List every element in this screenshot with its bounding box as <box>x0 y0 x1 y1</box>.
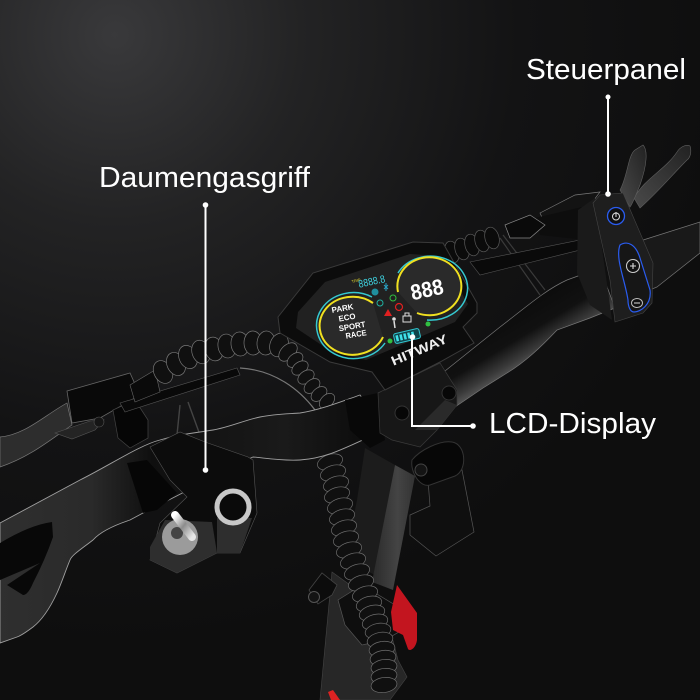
right grip <box>640 222 700 292</box>
right brake levers <box>620 145 691 208</box>
left grip and tube <box>0 395 385 643</box>
red folding lever <box>391 585 417 650</box>
label: Daumengasgriff: Daumengasgriff <box>99 162 311 194</box>
callout line: Steuerpanel <box>605 94 611 197</box>
trip readout: TRIP <box>351 277 361 284</box>
blue outline around plus and minus <box>619 243 650 312</box>
right tube <box>440 268 615 407</box>
control panel <box>577 193 653 322</box>
label: Steuerpanel: Steuerpanel <box>526 54 686 86</box>
display housing <box>278 242 477 390</box>
left gauge <box>317 293 385 359</box>
battery indicator <box>393 328 421 344</box>
handlebar <box>0 222 700 643</box>
callout line: LCD-Display <box>410 334 476 429</box>
right gauge <box>397 256 468 320</box>
stem clamp <box>345 363 457 448</box>
HITWAY logo: HITWAY <box>389 331 450 368</box>
right cables and brake housing <box>442 192 600 295</box>
icon: plus button <box>626 260 640 272</box>
left brake lever <box>0 403 72 467</box>
stem and folding column <box>308 448 415 700</box>
folding latch <box>410 442 474 556</box>
thumb throttle <box>127 432 257 573</box>
callout line: Daumengasgriff <box>203 202 208 473</box>
right gauge: 888 <box>408 274 446 305</box>
LCD display <box>278 242 477 390</box>
vertical coiled cable <box>315 451 398 694</box>
left gauge: RACE <box>345 328 368 341</box>
upper coiled cable <box>120 330 338 435</box>
trip readout <box>351 273 386 291</box>
icon: power button <box>608 208 624 224</box>
left gauge: SPORT <box>338 320 366 333</box>
status icons <box>372 283 430 344</box>
trip readout: 8888.8 <box>357 273 386 291</box>
left gauge: ECO <box>338 312 356 324</box>
label: LCD-Display: LCD-Display <box>489 408 657 440</box>
left brake assembly <box>55 373 148 448</box>
icon: minus button <box>632 298 642 308</box>
left gauge: PARK <box>331 302 354 315</box>
